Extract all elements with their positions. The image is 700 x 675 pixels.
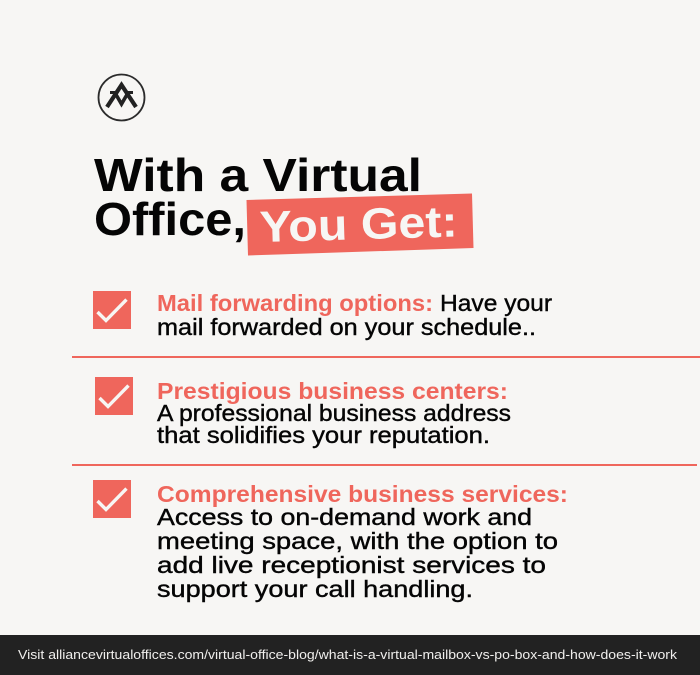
icon: checkbox 1 (93, 291, 131, 329)
item: business services: meeting space, with the option to (157, 528, 558, 554)
item: business centers: Prestigious business centers: (157, 378, 508, 404)
item: business services: Access to on-demand work and (157, 504, 532, 530)
icon: checkbox 2 (95, 377, 133, 415)
item: business services: Comprehensive business services: (157, 481, 568, 507)
icon: checkbox 3 (93, 480, 131, 518)
item: mail forwarding: mail forwarded on your schedule.. (157, 314, 536, 340)
item: business services: support your call handling. (157, 576, 473, 602)
item: business services (93, 480, 568, 602)
item: business centers: A professional business address (157, 400, 511, 426)
item: mail forwarding: Mail forwarding options: (157, 290, 433, 316)
title highlight: You Get (246, 194, 474, 256)
icon: logo (98, 74, 144, 120)
footer bar: Visit alliancevirtualoffices.com/virtual-office-blog/what-is-a-virtual-mailbox-vs-po-box-and-how-does-it-work (18, 647, 678, 662)
item: business centers: that solidifies your reputation. (157, 422, 490, 448)
item: mail forwarding: Have your (440, 290, 552, 316)
title: With a Virtual (94, 149, 422, 201)
title highlight: You Get: You Get: (259, 197, 458, 252)
item: mail forwarding (93, 290, 552, 340)
footer bar (0, 635, 700, 675)
title (94, 149, 422, 245)
title: Office, (94, 193, 246, 245)
item: business centers (95, 377, 511, 448)
item: business services: add live receptionist services to (157, 552, 546, 578)
